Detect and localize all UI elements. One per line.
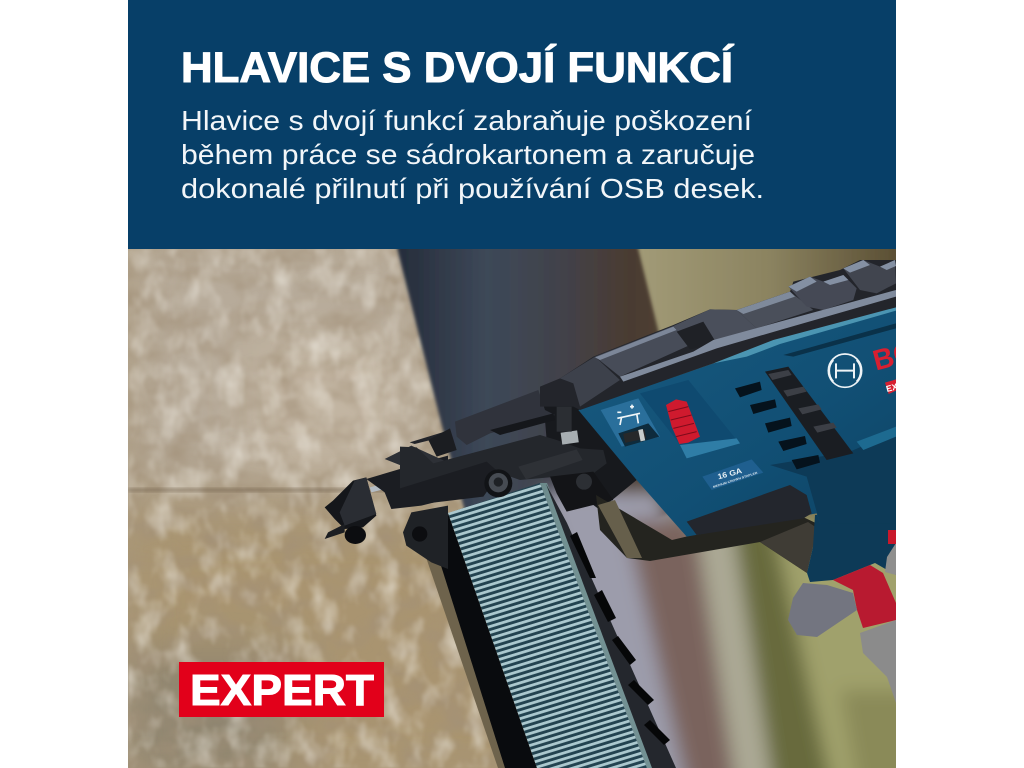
lower arm plate bbox=[400, 462, 500, 507]
long shadow on housing bbox=[783, 323, 896, 357]
silver bolt bbox=[561, 430, 579, 445]
latch bbox=[384, 446, 444, 465]
stapler body bbox=[540, 260, 919, 537]
staple strip bbox=[448, 483, 647, 768]
staple strip edge bbox=[540, 483, 654, 768]
tip neck bbox=[366, 456, 448, 509]
upper arm bbox=[400, 435, 606, 488]
magazine pivot bbox=[403, 506, 448, 569]
label: 16 GA bbox=[702, 459, 763, 490]
body text bbox=[181, 105, 764, 204]
stapler arm and driver bbox=[400, 390, 637, 512]
body text: Hlavice s dvojí funkcí zabraňuje poškození bbox=[181, 105, 752, 136]
body text: dokonalé přilnutí při používání OSB desek. bbox=[181, 173, 764, 204]
lighter blue patch bbox=[857, 427, 896, 450]
grey glove upper bbox=[885, 543, 896, 575]
top shell main facets bbox=[595, 326, 690, 377]
background: dark post and khaki wall bbox=[395, 240, 910, 560]
vent slots bbox=[735, 382, 820, 469]
light top edge of housing bbox=[713, 307, 896, 363]
background: blurred OSB board bbox=[128, 249, 498, 768]
latch spring bbox=[410, 432, 443, 444]
driver housing bbox=[455, 390, 555, 445]
body text: během práce se sádrokartonem a zaručuje bbox=[181, 139, 755, 170]
dark grille bbox=[765, 367, 853, 460]
grey glove finger bbox=[788, 583, 857, 637]
tip plate bbox=[340, 477, 376, 526]
tip spike bbox=[325, 524, 345, 539]
mode panel bbox=[601, 398, 660, 447]
red BOSCH brand: BO bbox=[870, 335, 919, 377]
center screw bbox=[484, 469, 512, 497]
magazine rail, tan edge bbox=[426, 559, 505, 768]
grey glove lower bbox=[860, 620, 896, 703]
red depth wheel bbox=[666, 399, 700, 444]
magazine rail, black channel bbox=[441, 514, 537, 768]
badge: EXPERT: EXPERT bbox=[190, 666, 374, 715]
label: 16 GA: 16 GA bbox=[717, 466, 743, 481]
tip highlight bbox=[370, 486, 382, 492]
stapler magazine bbox=[416, 483, 676, 768]
tip foot bbox=[345, 526, 366, 544]
label: 16 GA: MEDIUM CROWN STAPLER bbox=[712, 470, 759, 489]
red EXPERT tag: EX bbox=[885, 381, 899, 394]
blue housing bbox=[578, 308, 896, 537]
top shell base bbox=[540, 260, 896, 410]
latch post bbox=[428, 428, 457, 457]
ridge blocks bbox=[788, 275, 857, 310]
top shell left facet bbox=[560, 357, 620, 407]
grip side facet bbox=[760, 522, 820, 573]
mode switch bbox=[618, 423, 659, 447]
lower right darker housing bbox=[770, 432, 896, 523]
photo: stapler against OSB board bbox=[128, 230, 930, 768]
red switch bbox=[888, 530, 896, 544]
tan underside facet bbox=[598, 500, 642, 558]
top shell light band bbox=[620, 290, 896, 382]
glove and trigger bbox=[788, 530, 896, 703]
driver slot bbox=[490, 413, 555, 435]
panel: blue header banner bbox=[128, 0, 896, 249]
right screw bbox=[576, 474, 592, 490]
mode icon bbox=[617, 405, 640, 425]
magazine pusher rail with ridges bbox=[546, 484, 676, 768]
background: photo base colours bbox=[128, 249, 682, 768]
dark underside shell bbox=[596, 495, 820, 573]
stapler underside bbox=[596, 495, 896, 582]
stapler nose tip bbox=[325, 431, 448, 569]
bracket bbox=[550, 472, 613, 512]
background: blurred stripes below stapler bbox=[540, 490, 930, 768]
title: HLAVICE S DVOJÍ FUNKCÍ bbox=[181, 44, 734, 92]
tip jaw bbox=[325, 477, 376, 529]
dark column behind housing bbox=[543, 400, 637, 510]
housing recess bbox=[640, 380, 737, 447]
bosch logo bbox=[828, 354, 862, 387]
dark grip pad bbox=[687, 485, 812, 535]
red trigger bbox=[833, 565, 896, 628]
dark handle bbox=[807, 510, 896, 582]
bolt column bbox=[557, 407, 572, 432]
bar bbox=[518, 449, 583, 479]
